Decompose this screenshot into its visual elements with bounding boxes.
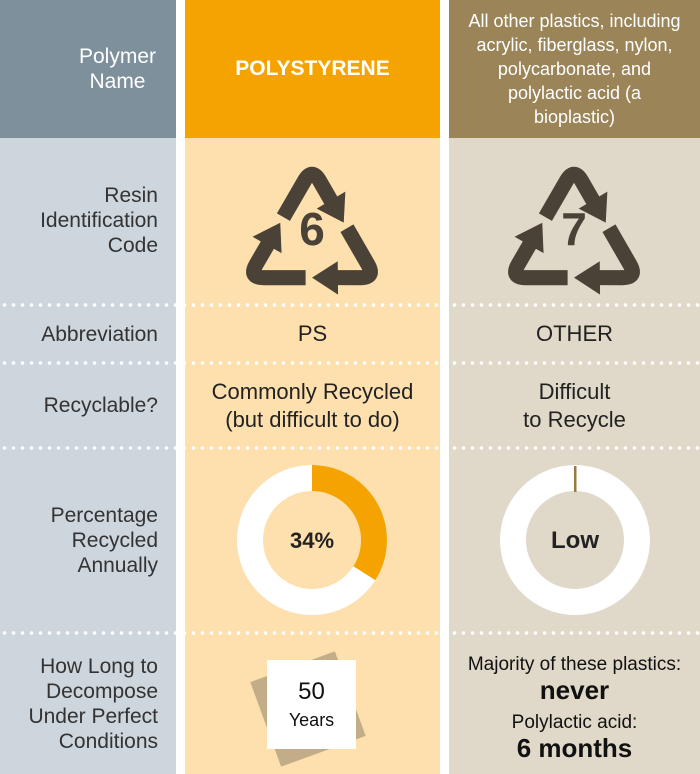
text: commonly recycled: Commonly Recycled [212,378,413,404]
column: other: acrylic, fiberglass, nylon, [476,35,673,55]
column: other: bioplastic) [534,107,615,127]
text: decompose other: 6 months [517,732,632,762]
text: difficult [523,378,626,432]
text: PS: PS [298,321,327,346]
donut: 34%: 34% [290,528,334,553]
text: commonly recycled [212,378,413,432]
column: labels: Polymer [79,45,156,68]
label: resin code: Resin [104,184,158,207]
column: other [449,0,700,774]
label: percentage: Percentage [51,504,158,527]
column: polystyrene: POLYSTYRENE [235,57,390,80]
label: resin code: Identification [40,209,158,232]
text: decompose other: Polylactic acid: [512,712,637,732]
callout: 50 years [250,652,366,766]
label: decompose: Under Perfect [28,704,158,728]
label: resin code [40,184,158,257]
column: other: polylactic acid (a [508,83,641,103]
donut: low: Low [551,527,599,554]
column: other: All other plastics, including [468,11,681,31]
text: decompose other: never [540,674,609,704]
column: labels: Name [89,70,146,93]
column: polystyrene [185,0,440,774]
text: difficult: Difficult [539,378,610,404]
text: commonly recycled: (but difficult to do) [225,406,400,432]
label: recyclable: Recyclable? [44,394,158,417]
icon: resin code 7 [508,166,640,294]
donut: low [500,465,650,615]
label: percentage: Recycled [72,529,158,552]
column: labels [0,0,176,774]
icon: resin code 7: 7 [561,203,587,255]
callout: 50 years: 50 [298,678,325,705]
label: decompose: Decompose [46,680,158,702]
text: OTHER: OTHER [536,321,613,346]
text: difficult: to Recycle [523,406,626,432]
label: resin code: Code [108,234,158,257]
label: abbreviation: Abbreviation [41,322,158,346]
label: decompose: Conditions [59,730,158,752]
donut: 34% [237,465,387,615]
label: percentage [51,504,158,577]
icon: resin code 6: 6 [299,203,325,255]
column: other: polycarbonate, and [498,59,651,79]
label: decompose [28,654,158,752]
text: decompose other [468,654,681,762]
label: decompose: How Long to [40,654,158,678]
text: decompose other: Majority of these plastics: [468,654,681,674]
icon: resin code 6 [246,166,378,294]
label: percentage: Annually [77,554,158,577]
callout: 50 years: Years [289,710,334,730]
